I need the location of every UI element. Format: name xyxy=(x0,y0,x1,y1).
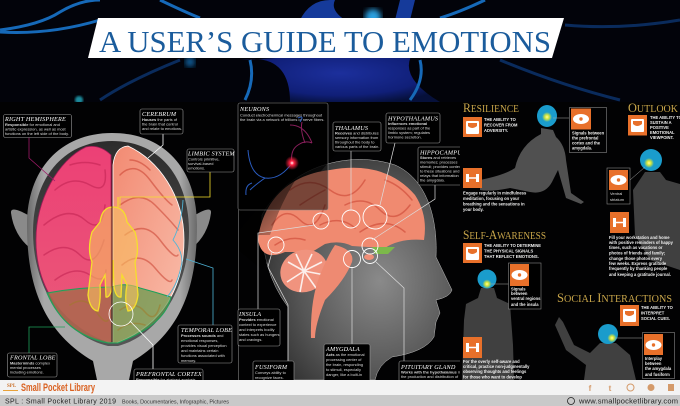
callout: hippocampus: HIPPOCAMPUS xyxy=(419,150,465,156)
advice text: Engage regularly in mindfulness xyxy=(463,190,527,196)
callout: amygdala: to stimuli, especially xyxy=(326,367,361,372)
callout: limbic system: Controls primitive, xyxy=(188,156,220,162)
callout: frontal lobe: FRONTAL LOBE xyxy=(9,354,56,362)
leader lines xyxy=(238,143,435,380)
panel: top view of head and brain xyxy=(11,133,211,380)
heading: SOCIAL INTERACTIONS xyxy=(557,290,672,305)
callout: hypothalamus: responses as part of the xyxy=(388,126,431,130)
cerebrum xyxy=(258,168,425,256)
skull outer xyxy=(27,133,197,380)
footer: logo bar xyxy=(0,380,680,395)
panel: neurons xyxy=(238,103,328,210)
callout: thalamus xyxy=(333,122,381,151)
icon: globe xyxy=(568,398,574,404)
callout: insula: and cravings. xyxy=(239,337,262,342)
text: RECOVER FROM xyxy=(484,122,518,128)
advice text xyxy=(608,235,674,277)
callout: amygdala: processing center of xyxy=(326,357,362,362)
text xyxy=(484,244,541,258)
callout: thalamus: Receives and distributes xyxy=(335,130,379,136)
callout: hypothalamus: limbic system; regulates xyxy=(388,130,430,135)
callout: thalamus: THALAMUS xyxy=(335,125,368,132)
signal panel: Signals xyxy=(511,286,526,292)
callout: hypothalamus xyxy=(386,113,440,143)
temporal lobe outline xyxy=(167,200,183,297)
callout: temporal lobe: and maintains certain xyxy=(181,348,218,353)
callout: amygdala: AMYGDALA xyxy=(325,346,360,353)
callout: hippocampus: the amygdala. xyxy=(420,178,445,182)
figure: reclining body xyxy=(480,128,584,204)
region circles xyxy=(268,205,387,268)
callout: insula: INSULA xyxy=(238,311,261,318)
text xyxy=(641,305,674,321)
callout: hippocampus: memories; processes xyxy=(420,160,457,164)
advice text: with positive reminders of happy xyxy=(608,240,674,245)
callout: prefrontal cortex: PREFRONTAL CORTEX xyxy=(135,371,202,378)
callout: thalamus: sensory information from xyxy=(335,135,379,140)
glow xyxy=(608,334,616,342)
figure: standing body xyxy=(462,288,514,380)
callout: hypothalamus: hormone secretion. xyxy=(388,134,422,140)
icon: book xyxy=(620,305,639,326)
social icons: f xyxy=(589,384,592,393)
icon: dumbbell xyxy=(463,168,482,188)
advice text: For the overly self-aware and xyxy=(463,359,520,364)
callout: insula: states such as hungers xyxy=(239,332,280,337)
heading: OUTLOOK xyxy=(628,100,678,115)
callout: right hemisphere: Responsible for emotional and xyxy=(5,122,60,127)
glow xyxy=(542,112,552,122)
icon: logo: SPL xyxy=(7,384,17,389)
advice text: critical, practice non-judgmentally xyxy=(463,364,530,369)
icon: logo xyxy=(3,384,18,391)
head fade xyxy=(262,164,328,263)
advice text: for those who want to develop xyxy=(463,374,522,380)
midline fissure xyxy=(112,160,113,342)
head silhouette xyxy=(262,159,452,380)
callout: temporal lobe: TEMPORAL LOBE xyxy=(181,327,232,334)
signal panel: Ventral xyxy=(610,191,622,196)
callout: temporal lobe xyxy=(178,325,232,363)
heading: RESILIENCE xyxy=(463,100,519,115)
callout: cerebrum xyxy=(140,109,183,134)
callout: right hemisphere: artistic expression, as well as most xyxy=(5,126,67,132)
glow xyxy=(482,280,492,288)
panel: neurons: the brain via a network of trillions of nerve fibers. xyxy=(240,117,324,122)
signal panel: the prefrontal xyxy=(572,136,598,140)
prefrontal circle xyxy=(109,302,133,326)
advice text: observing thoughts and feelings xyxy=(463,369,527,374)
callout: hypothalamus: HYPOTHALAMUS xyxy=(387,116,438,122)
callout: fusiform: recognize faces. xyxy=(255,375,284,380)
advice text: change those photos every xyxy=(609,256,663,261)
callout: limbic system: survival-based xyxy=(188,161,213,166)
callout: pituitary gland: PITUITARY GLAND xyxy=(400,364,456,371)
callout: frontal lobe: mental processes xyxy=(10,365,41,370)
icon: book xyxy=(463,243,482,263)
signal panel: cortex and the xyxy=(572,140,601,146)
callout: prefrontal cortex xyxy=(134,368,204,380)
callout: right hemisphere: RIGHT HEMISPHERE xyxy=(4,116,66,123)
callout: temporal lobe: emotional responses, xyxy=(181,338,218,343)
advice text: photos of friends and family; xyxy=(609,250,665,256)
callout: cerebrum: CEREBRUM xyxy=(142,111,177,118)
callout: limbic system: LIMBIC SYSTEM xyxy=(187,150,235,158)
brain head xyxy=(640,149,662,171)
brain head xyxy=(537,105,557,127)
text: ADVERSITY. xyxy=(484,128,508,133)
advice text: frequently by thanking people xyxy=(609,266,668,271)
logo name: Small Pocket Library xyxy=(21,382,96,394)
signal panel xyxy=(570,108,606,152)
footer: credit bar: www.smallpocketlibrary.com xyxy=(578,396,678,406)
signal panel: striatum xyxy=(610,197,625,202)
callout: hippocampus: to these situations and xyxy=(420,168,459,174)
text: SOCIAL CUES. xyxy=(641,316,670,321)
left hemisphere xyxy=(113,146,184,343)
icon: dumbbell xyxy=(610,212,629,233)
text xyxy=(484,117,518,133)
callout: frontal lobe xyxy=(8,353,57,377)
callout: cerebrum: and relate to emotions. xyxy=(142,126,182,131)
callout: right hemisphere xyxy=(4,114,72,138)
callout: temporal lobe: functions associated with xyxy=(181,353,225,358)
icon: ears xyxy=(11,209,211,248)
signal panel: Signals between xyxy=(572,130,605,136)
callout: frontal lobe: Masterminds complex xyxy=(10,360,50,366)
signal panel xyxy=(508,263,541,309)
callout: amygdala: the brain, responding xyxy=(326,362,363,367)
section: resilience xyxy=(463,100,606,212)
icon: dumbbell xyxy=(463,337,482,358)
callout: temporal lobe: memory. xyxy=(181,358,196,363)
advice text: and keeping a gratitude journal. xyxy=(609,272,671,277)
callout: temporal lobe: Processes sounds and xyxy=(181,333,223,338)
footer: credit bar: Books, Documentaries, Infographic, Pictures xyxy=(122,400,229,406)
social icons xyxy=(589,384,674,393)
section: outlook xyxy=(607,100,680,277)
callout: right hemisphere: functions on the left side of the body. xyxy=(5,131,69,136)
advice text: meditation, focusing on your xyxy=(463,196,520,201)
callout: insula: context to experience xyxy=(239,322,277,327)
advice text: your body. xyxy=(463,207,484,212)
header neuron image xyxy=(0,0,680,104)
signal panel: between xyxy=(645,361,662,366)
text: THE ABILITY TO xyxy=(484,117,517,122)
signal panel: between xyxy=(511,291,528,296)
figure: raised arm body xyxy=(555,317,636,380)
glow xyxy=(644,158,654,168)
callout: hippocampus: Stores and retrieves xyxy=(420,155,456,160)
frontal lobe green overlay xyxy=(47,285,171,343)
advice text xyxy=(463,190,527,212)
callout: pituitary gland: the production and distribution of xyxy=(401,374,459,379)
footer: credit bar xyxy=(0,395,680,406)
signal panel: and fusiform xyxy=(645,372,670,377)
text: INTERPRET xyxy=(641,310,665,316)
advice text: Fill your workstation and home xyxy=(609,235,670,240)
callout: limbic system xyxy=(187,149,235,172)
pituitary green xyxy=(372,247,395,254)
brain stem xyxy=(311,245,352,338)
text: VIEWPOINT. xyxy=(650,135,674,140)
callout: cerebrum: the brain that control xyxy=(142,122,178,126)
signal panel xyxy=(607,168,630,204)
signal panel xyxy=(642,332,674,378)
text: EMOTIONAL xyxy=(650,130,675,135)
advice text: breathing and the sensations in xyxy=(463,202,525,206)
callout: fusiform: FUSIFORM xyxy=(254,364,288,371)
figure: woman body xyxy=(633,172,680,270)
callout: insula: Provides emotional xyxy=(239,317,274,322)
brain head xyxy=(598,324,618,344)
callout: amygdala: danger, like a built-in xyxy=(326,372,362,377)
social icons: t xyxy=(609,384,612,393)
cerebellum xyxy=(280,250,326,292)
callout: amygdala: Acts as the emotional xyxy=(326,352,365,357)
text xyxy=(650,115,680,140)
signal panel: Interplay xyxy=(645,356,663,361)
callout: fusiform: Conveys ability to xyxy=(255,370,287,375)
advice text: times, such as vacations or xyxy=(609,245,663,250)
signal panel: amygdala. xyxy=(572,146,592,150)
panel: side view of head and brain xyxy=(238,143,452,380)
text: POSITIVE xyxy=(650,125,669,130)
panel: neurons: NEURONS xyxy=(239,106,269,113)
callout: prefrontal cortex: Responsible for abstract analysis xyxy=(136,377,196,382)
callout: hypothalamus: Influences emotional xyxy=(388,121,427,126)
panel: neurons: Conduct electrochemical messages throughout xyxy=(240,112,323,118)
callout: insula xyxy=(238,309,280,346)
callout: insula: and interprets bodily xyxy=(239,327,274,332)
amygdala and pituitary xyxy=(364,254,374,260)
callout: hippocampus xyxy=(418,146,460,186)
text: THE ABILITY TO DETERMINE xyxy=(484,243,541,248)
callout: pituitary gland: Works with the hypothalamus in xyxy=(401,370,461,374)
limbic system yellow outline xyxy=(88,197,138,311)
section: self-awareness xyxy=(462,227,546,380)
neuron illustration xyxy=(246,117,312,195)
callout: thalamus: throughout the body to xyxy=(335,140,375,144)
advice text xyxy=(463,359,530,380)
callout: thalamus: various parts of the brain. xyxy=(335,144,379,149)
callout: pituitary gland xyxy=(398,360,460,380)
title banner: A USER’S GUIDE TO EMOTIONS xyxy=(99,24,551,59)
callout: amygdala xyxy=(324,344,370,380)
leader lines: left panel xyxy=(29,134,213,369)
section: social interactions xyxy=(555,290,674,380)
signal panel: and the insula xyxy=(511,302,539,307)
text: SUSTAIN A xyxy=(650,120,672,125)
signal panel: ventral regions xyxy=(511,296,541,301)
callout: hippocampus: relays that information xyxy=(420,173,459,178)
callout: hippocampus: stimuli; provides context xyxy=(420,164,463,169)
signal panel: the amygdala xyxy=(645,366,672,371)
heading: SELF-AWARENESS xyxy=(463,227,546,242)
panel backdrop xyxy=(0,102,680,380)
text: THAT REFLECT EMOTIONS. xyxy=(484,254,539,259)
callout: limbic system: emotions. xyxy=(188,166,205,170)
right hemisphere xyxy=(36,146,111,343)
icon: book xyxy=(463,117,482,137)
callout: temporal lobe: provides visual perception xyxy=(181,343,227,348)
icon: book xyxy=(628,115,647,136)
advice text: few weeks. Express gratitude xyxy=(609,261,667,266)
callout: cerebrum: Houses the parts of xyxy=(142,117,178,122)
footer: credit bar: SPL : Small Pocket Library 2019 xyxy=(5,398,116,406)
text: THE PHYSICAL SIGNALS xyxy=(484,248,534,254)
skull inner xyxy=(33,141,189,346)
callout: fusiform xyxy=(252,360,294,380)
text: THE ABILITY TO xyxy=(641,305,674,310)
callout: frontal lobe: including emotions. xyxy=(10,370,44,374)
brain head xyxy=(478,270,496,288)
